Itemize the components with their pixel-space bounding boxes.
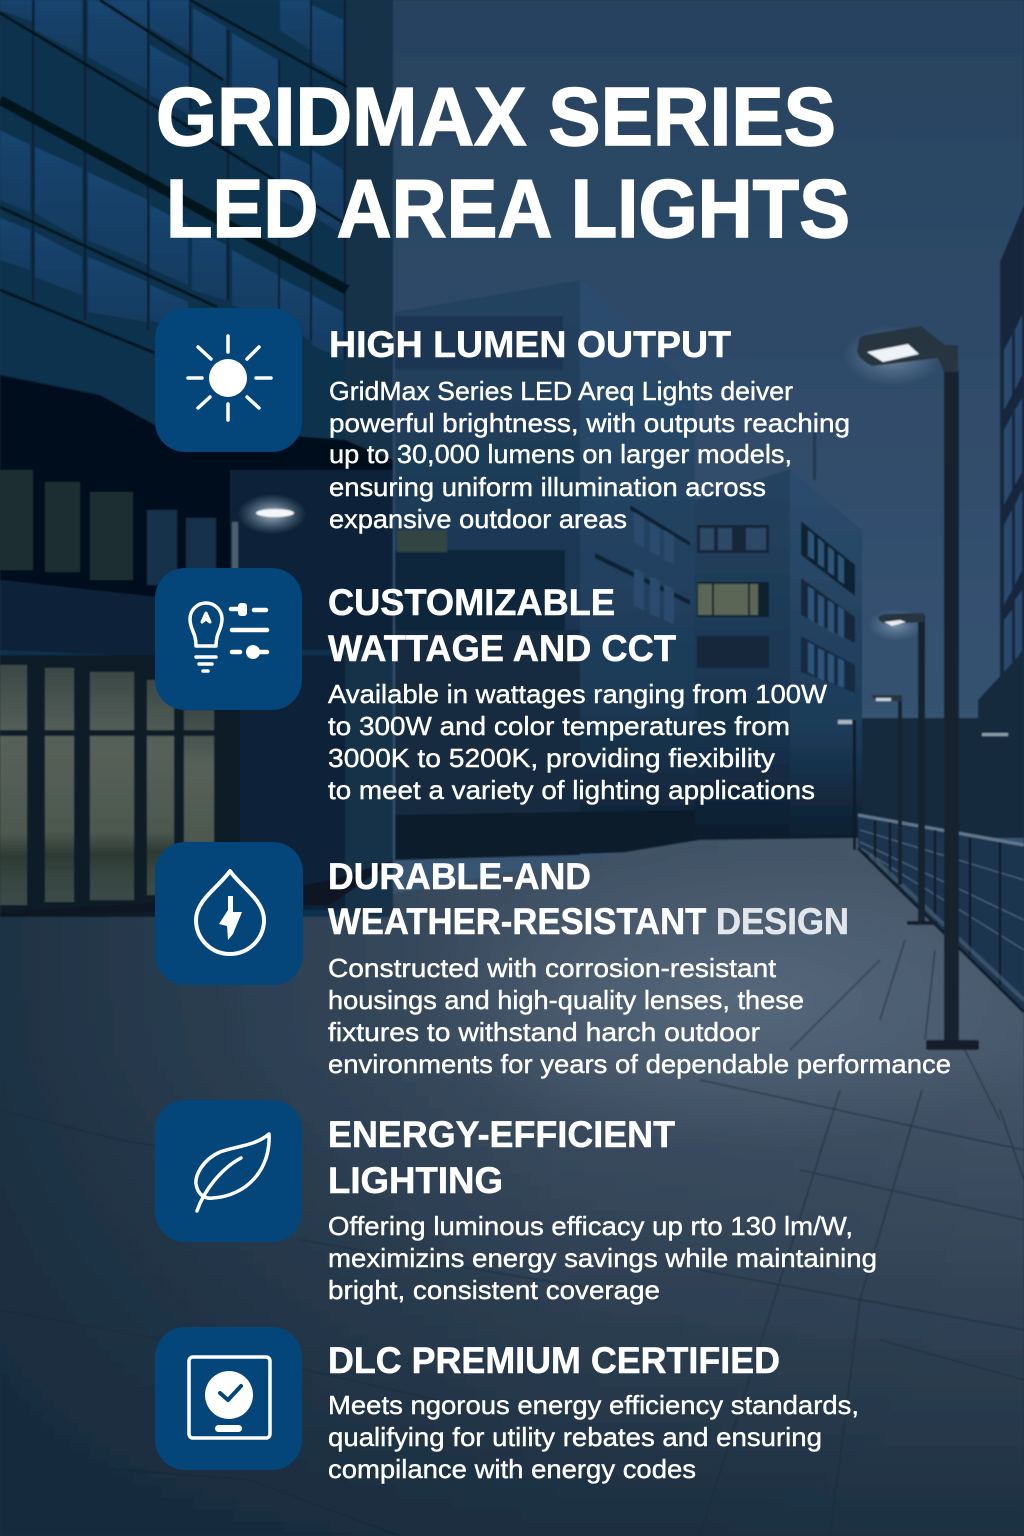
far right building: [978, 205, 1024, 838]
ground plaza: [0, 838, 1024, 1536]
text block: customizable wattage and cct: Available in wattages ranging from 100W: [328, 679, 827, 709]
text block: high lumen output: powerful brightness, with outputs reaching: [329, 408, 850, 438]
panel: energy-efficient lighting: [155, 1100, 877, 1305]
text block: customizable wattage and cct: to 300W and color temperatures from: [328, 711, 790, 741]
title: LED AREA LIGHTS: [166, 162, 850, 255]
heading: energy-efficient lighting: [328, 1114, 675, 1201]
text block: durable and weather-resistant design: fixtures to withstand harch outdoor: [328, 1017, 760, 1047]
text block: high lumen output: [329, 376, 850, 534]
text block: energy-efficient lighting: bright, consistent coverage: [328, 1275, 660, 1305]
text block: customizable wattage and cct: to meet a variety of lighting applications: [328, 775, 815, 805]
text block: durable and weather-resistant design: environments for years of dependable performance: [328, 1049, 951, 1079]
panel: durable and weather-resistant design: [155, 842, 951, 1079]
text block: dlc premium certified: compilance with energy codes: [328, 1454, 696, 1484]
text block: high lumen output: GridMax Series LED Areq Lights deiver: [329, 376, 793, 406]
heading: durable and weather-resistant design: [328, 856, 849, 942]
title: GRIDMAX SERIES: [156, 70, 836, 163]
text block: dlc premium certified: qualifying for utility rebates and ensuring: [328, 1422, 822, 1452]
street lamp 3: [871, 695, 902, 885]
right-side building: [695, 432, 862, 845]
fence: [858, 815, 1024, 1012]
text block: durable and weather-resistant design: housings and high-quality lenses, these: [328, 985, 804, 1015]
icon: bulb with sliders: [155, 568, 302, 710]
icon: leaf: [155, 1100, 302, 1242]
icon: sun: [155, 308, 302, 452]
panel: dlc premium certified: [155, 1327, 859, 1484]
heading: energy-efficient lighting: ENERGY-EFFICIENT: [328, 1114, 675, 1155]
heading: durable and weather-resistant design: WEATHER-RESISTANT DESIGN: [328, 901, 849, 942]
heading: dlc premium certified: DLC PREMIUM CERTIFIED: [328, 1340, 780, 1381]
panel: customizable wattage and cct: [155, 568, 827, 805]
text block: energy-efficient lighting: Offering luminous efficacy up rto 130 lm/W,: [328, 1211, 853, 1241]
heading: durable and weather-resistant design: DURABLE-AND: [328, 856, 591, 897]
text block: durable and weather-resistant design: [328, 953, 951, 1079]
text block: high lumen output: up to 30,000 lumens on larger models,: [329, 439, 792, 469]
text block: customizable wattage and cct: 3000K to 5200K, providing fiexibility: [328, 743, 775, 773]
street lamp main: [843, 326, 979, 1050]
panel: high lumen output: [155, 308, 850, 534]
text block: dlc premium certified: [328, 1390, 859, 1484]
heading: energy-efficient lighting: LIGHTING: [328, 1160, 503, 1201]
street lamp 2: [868, 609, 937, 925]
text block: energy-efficient lighting: [328, 1211, 877, 1305]
icon: certificate check: [155, 1327, 302, 1470]
heading: customizable wattage and cct: WATTAGE AND CCT: [328, 628, 676, 669]
text block: dlc premium certified: Meets ngorous energy efficiency standards,: [328, 1390, 859, 1420]
text block: customizable wattage and cct: [328, 679, 827, 805]
mid building: [395, 280, 695, 860]
text block: durable and weather-resistant design: Constructed with corrosion-resistant: [328, 953, 777, 983]
heading: high lumen output: HIGH LUMEN OUTPUT: [329, 324, 731, 365]
canopy: [0, 375, 393, 600]
icon: water drop with bolt: [155, 842, 303, 985]
title: [156, 70, 850, 255]
left building: [0, 0, 395, 917]
text block: high lumen output: ensuring uniform illumination across: [329, 472, 766, 502]
wall light: [238, 494, 306, 534]
text block: energy-efficient lighting: meximizins energy savings while maintaining: [328, 1243, 877, 1273]
street lamp far: [838, 720, 856, 850]
heading: customizable wattage and cct: CUSTOMIZABLE: [328, 582, 615, 623]
text block: high lumen output: expansive outdoor areas: [329, 504, 627, 534]
distant trees: [850, 718, 1024, 838]
heading: customizable wattage and cct: [328, 582, 676, 669]
